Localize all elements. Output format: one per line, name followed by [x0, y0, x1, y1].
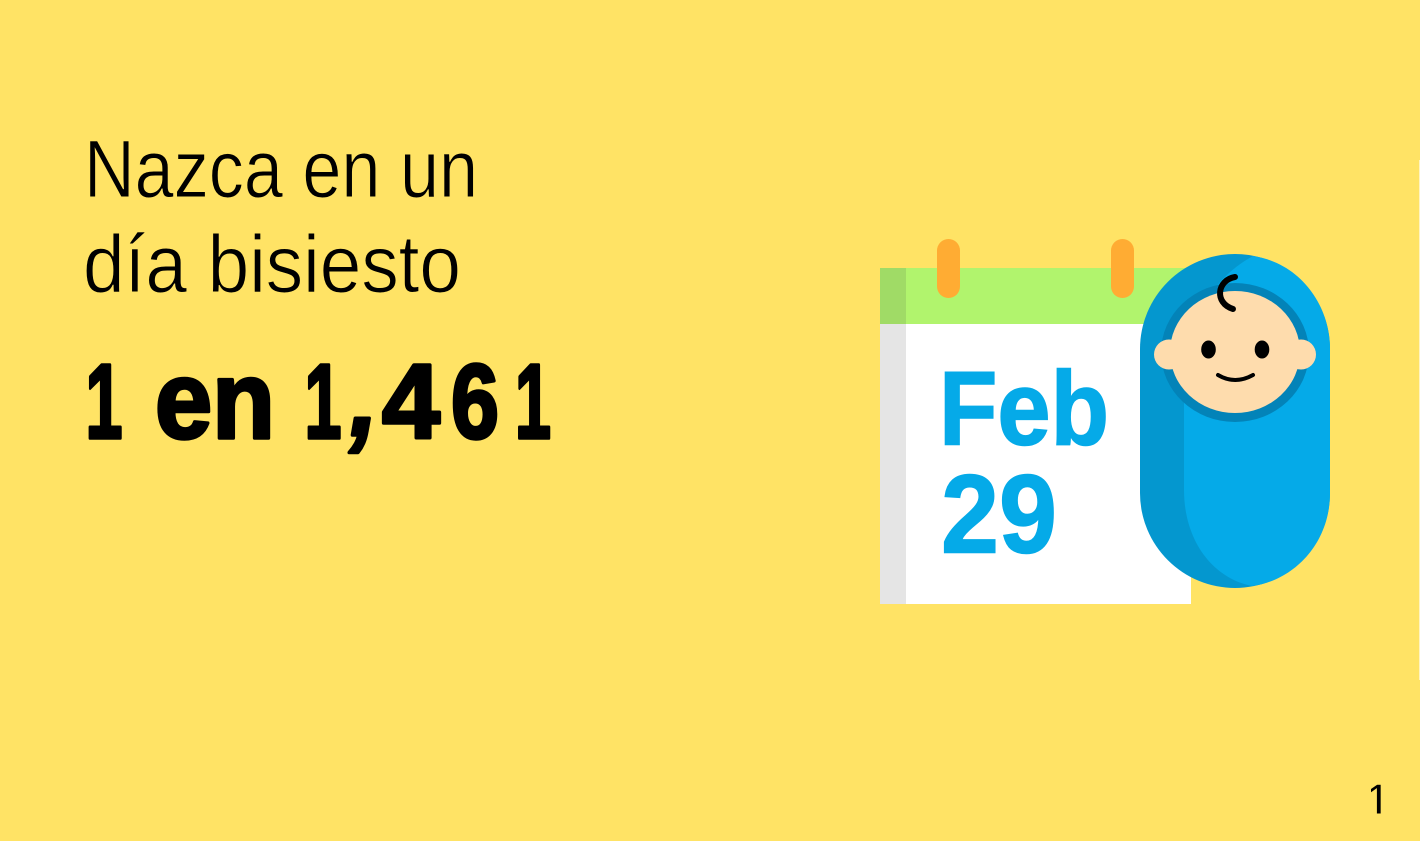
- statistic: 1 en 1,461: [86, 334, 551, 462]
- heading: Nazca en un día bisiesto: [83, 124, 478, 310]
- calendar date text: 29: [941, 452, 1057, 576]
- statistic: 1 en 1,461: ,: [348, 334, 378, 459]
- icon: swaddled baby: [1140, 254, 1330, 588]
- calendar date text: Feb: [939, 350, 1109, 468]
- statistic: 1 en 1,461: 1: [304, 343, 342, 461]
- statistic: 1 en 1,461: 1: [515, 343, 551, 461]
- statistic: 1 en 1,461: en: [155, 339, 275, 462]
- page number: 1: [1364, 774, 1392, 830]
- statistic: 1 en 1,461: 1: [86, 343, 122, 461]
- heading: Nazca en un día bisiesto: Nazca en un: [84, 124, 478, 215]
- calendar date text: [939, 350, 1109, 576]
- statistic: 1 en 1,461: 6: [451, 343, 499, 461]
- icon: calendar page Feb 29: [880, 239, 1191, 604]
- heading: Nazca en un día bisiesto: día bisiesto: [83, 219, 461, 310]
- statistic: 1 en 1,461: 4: [382, 343, 440, 461]
